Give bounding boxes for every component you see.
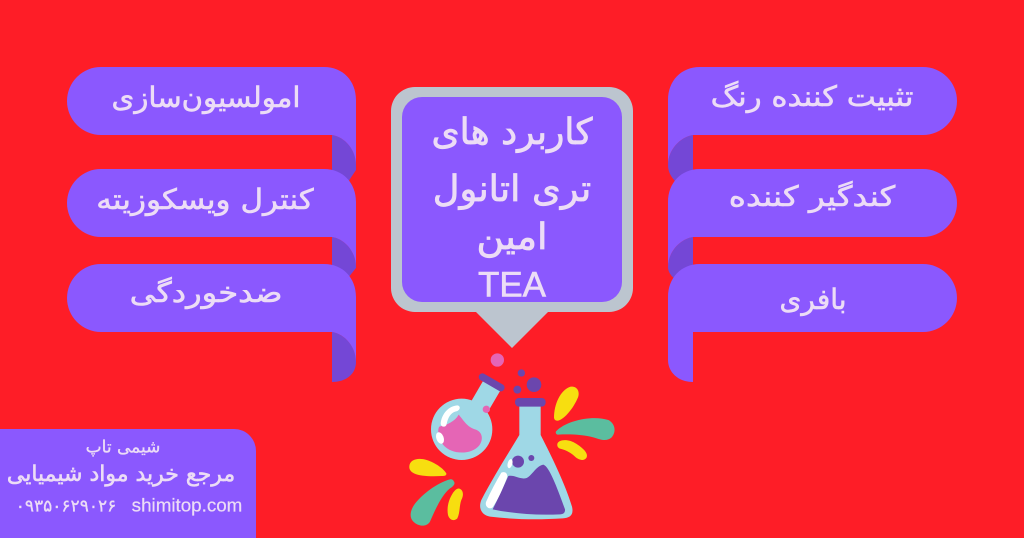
left fold 2: [332, 237, 356, 278]
callout frame: [391, 87, 633, 348]
label: buffer: بافری: [779, 283, 847, 316]
label: viscosity control: کنترل ویسکوزیته: [96, 183, 314, 216]
right banner 3: [668, 264, 957, 382]
footer panel: [0, 429, 256, 538]
right banner 1: [668, 67, 957, 165]
website: shimitop.com: [132, 495, 242, 516]
conical flask: [480, 398, 573, 519]
splashes left: [409, 459, 463, 526]
right fold 2: [668, 237, 693, 280]
left fold 3: [332, 332, 356, 382]
brand name: شیمی تاپ: [86, 438, 160, 458]
phone number: ۰۹۳۵۰۶۲۹۰۲۶: [16, 496, 116, 516]
right banner 2: [668, 169, 957, 267]
central callout: [391, 87, 633, 348]
left banner 1: [67, 67, 356, 165]
right banner group: [668, 67, 957, 382]
label: chelating: کندگیر کننده: [729, 180, 895, 213]
tagline: مرجع خرید مواد شیمیایی: [7, 462, 235, 487]
title line 3: امین: [477, 217, 547, 258]
label: colour fixing: تثبیت کننده رنگ: [711, 80, 913, 113]
right fold 1: [668, 135, 693, 182]
label: anti-corrosion: ضدخوردگی: [130, 276, 282, 309]
title: [432, 112, 593, 304]
title line 4: TEA: [478, 266, 546, 304]
left banner 2: [67, 169, 356, 267]
droplets: [491, 353, 541, 394]
footer text block: [7, 438, 242, 516]
left banner group: [67, 67, 356, 382]
label: emulsification: امولسیون‌سازی: [111, 81, 300, 114]
left banner 3: [67, 264, 356, 362]
callout inner panel: [402, 97, 622, 302]
left fold 1: [332, 135, 356, 182]
splashes right: [554, 387, 615, 460]
icon: chemistry flasks: [409, 353, 614, 526]
round flask: [431, 372, 506, 460]
title line 1: کاربرد های: [432, 112, 592, 153]
title line 2: تری اتانول: [433, 169, 591, 210]
